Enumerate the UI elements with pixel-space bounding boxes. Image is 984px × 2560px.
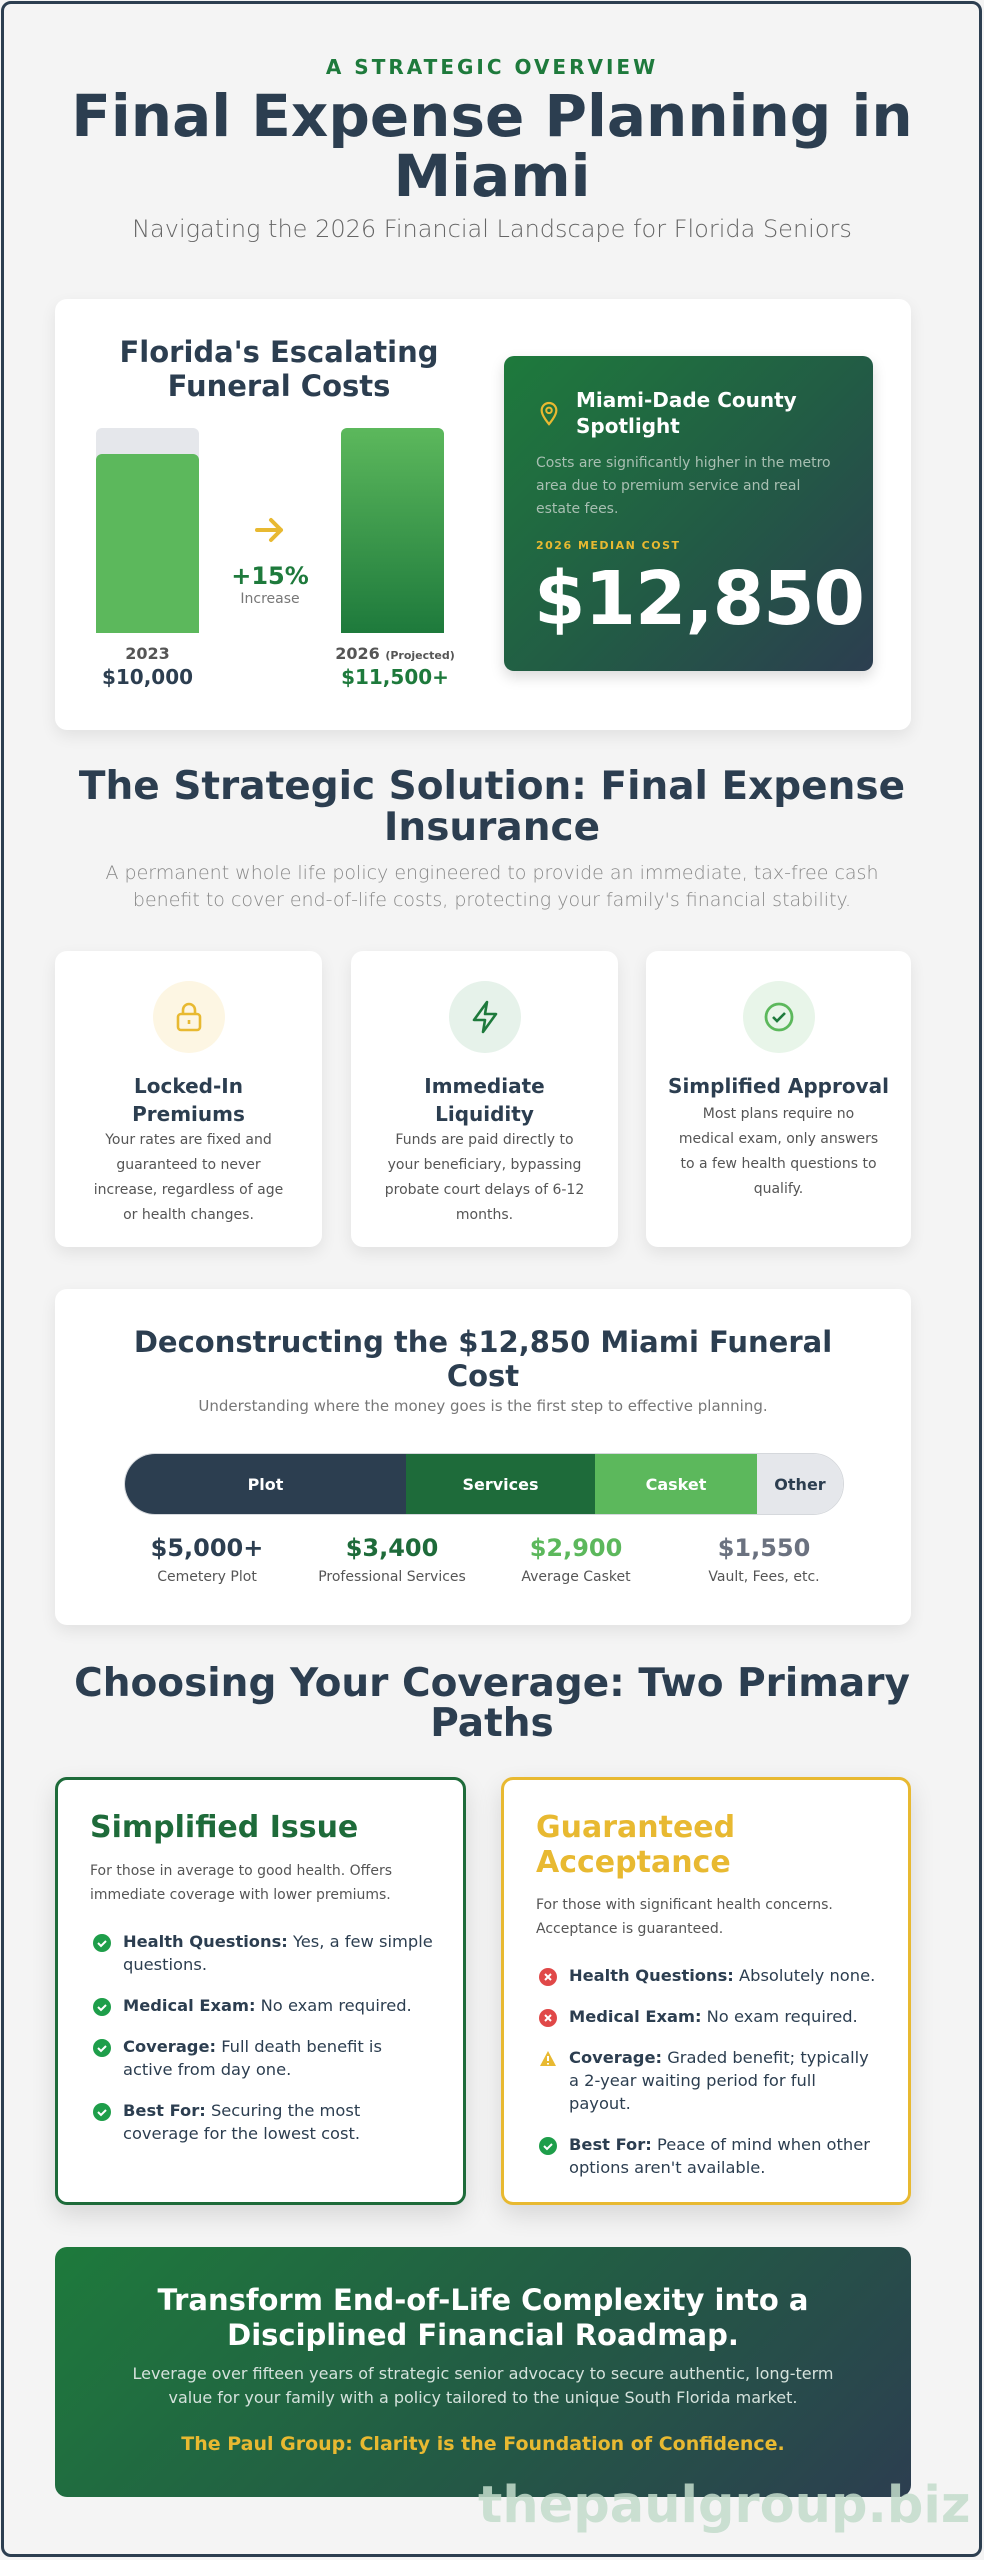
callout: miami-dade spotlight: 2026 MEDIAN COST — [536, 539, 681, 552]
watermark: thepaulgroup.biz — [478, 2476, 971, 2535]
bar chart: $11,500+ — [341, 665, 449, 689]
checklist: a 2-year waiting period for full — [569, 2071, 816, 2090]
heading: choosing coverage: Paths — [430, 1701, 554, 1746]
legend values: $2,900 — [530, 1534, 622, 1562]
callout: cta banner: Transform End-of-Life Complexity into a — [158, 2283, 808, 2317]
icon: bolt — [449, 981, 521, 1053]
stacked bar chart: Other — [774, 1475, 826, 1494]
stacked bar chart — [124, 1453, 844, 1515]
heading: strategic solution: The Strategic Solution: Final Expense — [79, 764, 905, 809]
legend values: $3,400 — [346, 1534, 438, 1562]
legend values: Vault, Fees, etc. — [708, 1569, 820, 1585]
panel: guaranteed acceptance: Acceptance — [536, 1845, 731, 1880]
checklist: Best For: Peace of mind when other — [569, 2135, 870, 2154]
legend values: Cemetery Plot — [157, 1569, 257, 1585]
callout: miami-dade spotlight — [504, 356, 873, 671]
bar chart: 2026 (Projected) — [335, 644, 455, 663]
checklist: coverage for the lowest cost. — [123, 2124, 360, 2143]
icon: lock — [153, 981, 225, 1053]
panel: immediate liquidity: Liquidity — [435, 1102, 534, 1126]
callout: cta banner — [55, 2247, 911, 2497]
panel: cost breakdown — [55, 1289, 911, 1625]
panel: locked-in premiums — [55, 951, 322, 1247]
panel: simplified issue — [55, 1777, 466, 2205]
panel: guaranteed acceptance: For those with significant health concerns. Acceptance is guaranteed. — [536, 1897, 833, 1937]
title: Final Expense Planning in — [71, 82, 913, 150]
bar chart — [96, 428, 455, 689]
subtitle: Navigating the 2026 Financial Landscape for Florida Seniors — [132, 215, 852, 243]
panel: guaranteed acceptance — [501, 1777, 911, 2205]
icon: pin — [540, 402, 558, 426]
legend values: Professional Services — [318, 1569, 466, 1585]
stacked bar chart: Plot — [248, 1475, 283, 1494]
legend values: $5,000+ — [151, 1534, 263, 1562]
callout: miami-dade spotlight: Spotlight — [576, 414, 680, 438]
heading: florida costs: Funeral Costs — [168, 369, 390, 403]
callout: miami-dade spotlight: Costs are significantly higher in the metro area due to premium service and real estate fees. — [536, 455, 831, 517]
panel: simplified issue: For those in average to good health. Offers immediate coverage with lower premiums. — [90, 1863, 392, 1903]
arrow — [255, 518, 284, 542]
checklist: Medical Exam: No exam required. — [123, 1996, 412, 2015]
panel: simplified approval: Simplified Approval — [668, 1074, 889, 1098]
heading: deconstructing: Deconstructing the $12,850 Miami Funeral — [134, 1325, 832, 1359]
checklist — [93, 1932, 433, 2143]
panel: escalating costs — [55, 299, 911, 730]
checklist: Medical Exam: No exam required. — [569, 2007, 858, 2026]
panel: locked-in premiums: Premiums — [132, 1102, 245, 1126]
callout: cta banner: Disciplined Financial Roadmap. — [227, 2318, 739, 2352]
panel: simplified approval: Most plans require no medical exam, only answers to a few health questions to qualify. — [679, 1106, 878, 1197]
panel: locked-in premiums: Locked-In — [134, 1074, 243, 1098]
checklist: Health Questions: Yes, a few simple questions. — [123, 1932, 433, 1974]
heading: choosing coverage — [74, 1661, 910, 1746]
legend values: Average Casket — [521, 1569, 631, 1585]
legend values — [151, 1534, 820, 1585]
checklist: options aren't available. — [569, 2158, 766, 2177]
text: solution intro: A permanent whole life policy engineered to provide an immediate, tax-free cash benefit to cover end-of-life costs, protecting your family's financial stability. — [106, 862, 878, 911]
panel: locked-in premiums: Your rates are fixed and guaranteed to never increase, regardless of age or health changes. — [94, 1132, 283, 1223]
panel: immediate liquidity: Immediate — [424, 1074, 545, 1098]
bar chart: +15% — [231, 562, 309, 590]
checklist: Best For: Securing the most — [123, 2101, 360, 2120]
legend values: $1,550 — [718, 1534, 810, 1562]
heading: florida costs: Florida's Escalating — [119, 335, 439, 369]
checklist: Coverage: Graded benefit; typically — [569, 2048, 869, 2067]
title — [71, 82, 913, 210]
callout: cta banner: Leverage over fifteen years of strategic senior advocacy to secure authentic, long-term value for your family with a policy tailored to the unique South Florida market. — [132, 2364, 834, 2407]
checklist — [539, 1966, 875, 2177]
checklist: active from day one. — [123, 2060, 291, 2079]
callout: cta banner: The Paul Group: Clarity is the Foundation of Confidence. — [181, 2433, 785, 2455]
stacked bar chart: Casket — [646, 1475, 706, 1494]
heading: deconstructing — [134, 1325, 832, 1393]
heading: strategic solution: Insurance — [384, 805, 600, 850]
checklist: Coverage: Full death benefit is — [123, 2037, 382, 2056]
callout: miami-dade spotlight: $12,850 — [534, 556, 864, 642]
stacked bar chart: Services — [462, 1475, 539, 1494]
heading: deconstructing: Cost — [447, 1359, 519, 1393]
checklist: payout. — [569, 2094, 631, 2113]
panel: immediate liquidity — [351, 951, 618, 1247]
panel: guaranteed acceptance: Guaranteed — [536, 1810, 735, 1845]
bar chart: Increase — [240, 591, 300, 607]
bar chart: 2023 — [125, 644, 170, 663]
bar chart: $10,000 — [102, 665, 193, 689]
icon: check circle — [743, 981, 815, 1053]
panel: simplified approval — [646, 951, 911, 1247]
heading: strategic solution — [79, 764, 905, 850]
panel: immediate liquidity: Funds are paid directly to your beneficiary, bypassing probate court delays of 6-12 months. — [385, 1132, 584, 1223]
title: Miami — [393, 142, 591, 210]
panel: cost breakdown: Understanding where the money goes is the first step to effective planning. — [198, 1397, 768, 1415]
eyebrow: A STRATEGIC OVERVIEW — [326, 55, 658, 79]
heading: choosing coverage: Choosing Your Coverage: Two Primary — [74, 1661, 910, 1706]
checklist: Health Questions: Absolutely none. — [569, 1966, 875, 1985]
heading: florida costs — [119, 335, 439, 403]
panel: simplified issue: Simplified Issue — [90, 1810, 358, 1845]
callout: miami-dade spotlight: Miami-Dade County — [576, 388, 797, 412]
